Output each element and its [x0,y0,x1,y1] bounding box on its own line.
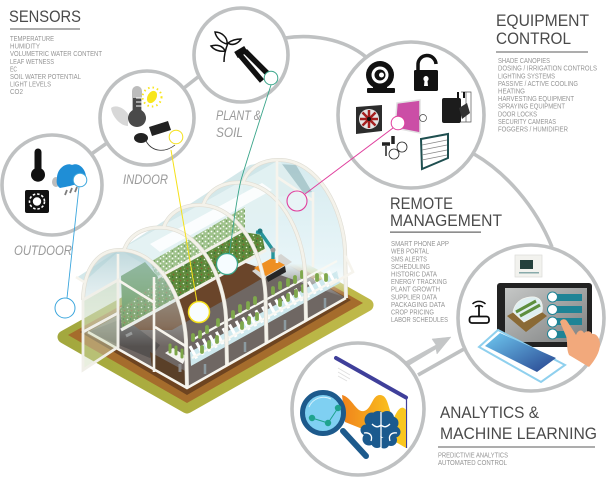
tablet [497,283,592,347]
equipment underline [496,51,588,53]
list: sensors: TEMPERATURE [10,36,54,43]
upper plant bed [150,207,245,278]
icon: security camera [366,61,395,93]
panel: outdoor sensors [2,135,102,235]
front hydroponic bench [190,261,340,374]
label: plant and soil: PLANT & [216,108,261,123]
list: equipment: HARVESTING EQUIPMENT [498,96,575,103]
list: remote management: SMART PHONE APP [391,241,449,248]
list: remote management: SUPPLIER DATA [391,294,437,301]
frame rails [76,161,353,388]
tree cluster [121,262,158,308]
dashboard buttons [548,292,582,339]
list: sensors: EC [10,66,17,73]
list: equipment: LIGHTING SYSTEMS [498,73,555,80]
icon: brain [360,411,400,448]
icon: phone [479,330,565,382]
list: equipment: SECURITY CAMERAS [498,119,556,126]
list: equipment: DOSING / IRRIGATION CONTROLS [498,66,597,73]
pointer: outdoor [55,173,87,318]
list: equipment: DOOR LOCKS [498,111,537,118]
browser window [334,357,407,448]
icon: leaves [211,32,241,62]
list: sensors: SOIL WATER POTENTIAL [10,74,81,81]
icon: wifi router [470,301,489,323]
arch shadows [83,160,346,388]
icon: foggers [382,136,407,159]
label: outdoor: OUTDOOR [14,243,72,258]
icon: louver vent [421,134,448,169]
panel: remote management [458,245,604,391]
greenhouse floor [88,243,346,388]
list: remote management: PLANT GROWTH [391,287,440,294]
list: equipment: HEATING [498,88,525,96]
shade canopy [76,158,283,282]
list: remote management [391,241,449,324]
connectors between circles [90,37,552,375]
robot arm [252,228,292,282]
icon: magnifier [302,392,366,456]
icon: indoor thermometer [128,86,146,127]
panel: plant and soil sensors [194,8,288,102]
icon: soil probe [236,49,269,81]
icon: sun [142,88,162,106]
heading: equipment control: EQUIPMENT [496,11,589,30]
pointer: plant and soil [216,71,278,274]
heading: sensors: SENSORS [9,7,81,26]
list: sensors: HUMIDITY [10,44,40,51]
list: equipment: SHADE CANOPIES [498,58,550,65]
heading: equipment control: CONTROL [496,29,571,48]
icon: rain cloud [52,164,86,195]
arrow: analytics to remote management [405,337,451,366]
sensors underline [10,28,80,30]
list: sensors: LIGHT LEVELS [10,82,51,89]
icon: grow light [395,100,426,133]
label: plant and soil: SOIL [216,125,243,140]
list: remote management: SCHEDULING [391,264,430,271]
greenhouse illustration [64,158,367,407]
front face glazing [83,250,187,388]
lower plant bed [120,232,265,330]
list: analytics: AUTOMATED CONTROL [438,460,507,467]
panel: equipment [338,42,484,188]
panel: analytics and machine learning [292,343,424,475]
icon: sensor probe [134,121,175,150]
heading: analytics and machine learning: MACHINE LEARNING [440,424,597,443]
small front table [165,345,186,372]
chart waves [342,395,406,448]
pointer: equipment [287,116,405,211]
list: remote management: CROP PRICING [391,310,434,316]
mini greenhouse [507,297,547,332]
icon: heater unit [442,92,471,123]
roof glazing [120,160,305,275]
heading: remote management: MANAGEMENT [390,211,502,230]
list: remote management: WEB PORTAL [391,249,429,256]
list: sensors [10,36,103,96]
ground base [64,236,367,407]
icon: padlock [414,55,438,91]
icon: sun box [25,190,49,213]
soil border [68,236,363,403]
analytics underline [438,446,595,448]
list: sensors: CO2 [10,89,23,96]
list: remote management: SMS ALERTS [391,256,427,263]
list: equipment: SPRAYING EQUIPMENT [498,104,566,111]
arches [83,160,346,388]
icon: exhaust fan [356,105,382,134]
panel: indoor sensors [100,71,194,165]
list: equipment: PASSIVE / ACTIVE COOLING [498,81,578,88]
icon: controller box [515,255,542,277]
open door [83,280,118,370]
pointer: indoor [169,130,210,322]
list: sensors: LEAF WETNESS [10,59,54,66]
icon: thermometer shadow [111,106,128,126]
list: remote management: PACKAGING DATA [391,302,445,309]
back end glazing [243,160,346,298]
heading: analytics and machine learning: ANALYTICS & [440,403,540,422]
list: analytics [438,452,508,467]
list: remote management: LABOR SCHEDULES [391,317,448,324]
list: analytics: PREDICTIVIE ANALYTICS [438,452,508,460]
list: equipment [498,58,597,134]
icon: hand [560,319,600,367]
list: equipment: FOGGERS / HUMIDIFIER [498,126,568,134]
icon: thermometer [32,149,45,181]
label: indoor: INDOOR [123,172,168,187]
list: sensors: VOLUMETRIC WATER CONTENT [10,51,103,58]
remote underline [390,232,481,233]
list: remote management: HISTORIC DATA [391,272,437,278]
list: remote management: ENERGY TRACKING [391,279,447,286]
heading: remote management: REMOTE [390,194,453,213]
